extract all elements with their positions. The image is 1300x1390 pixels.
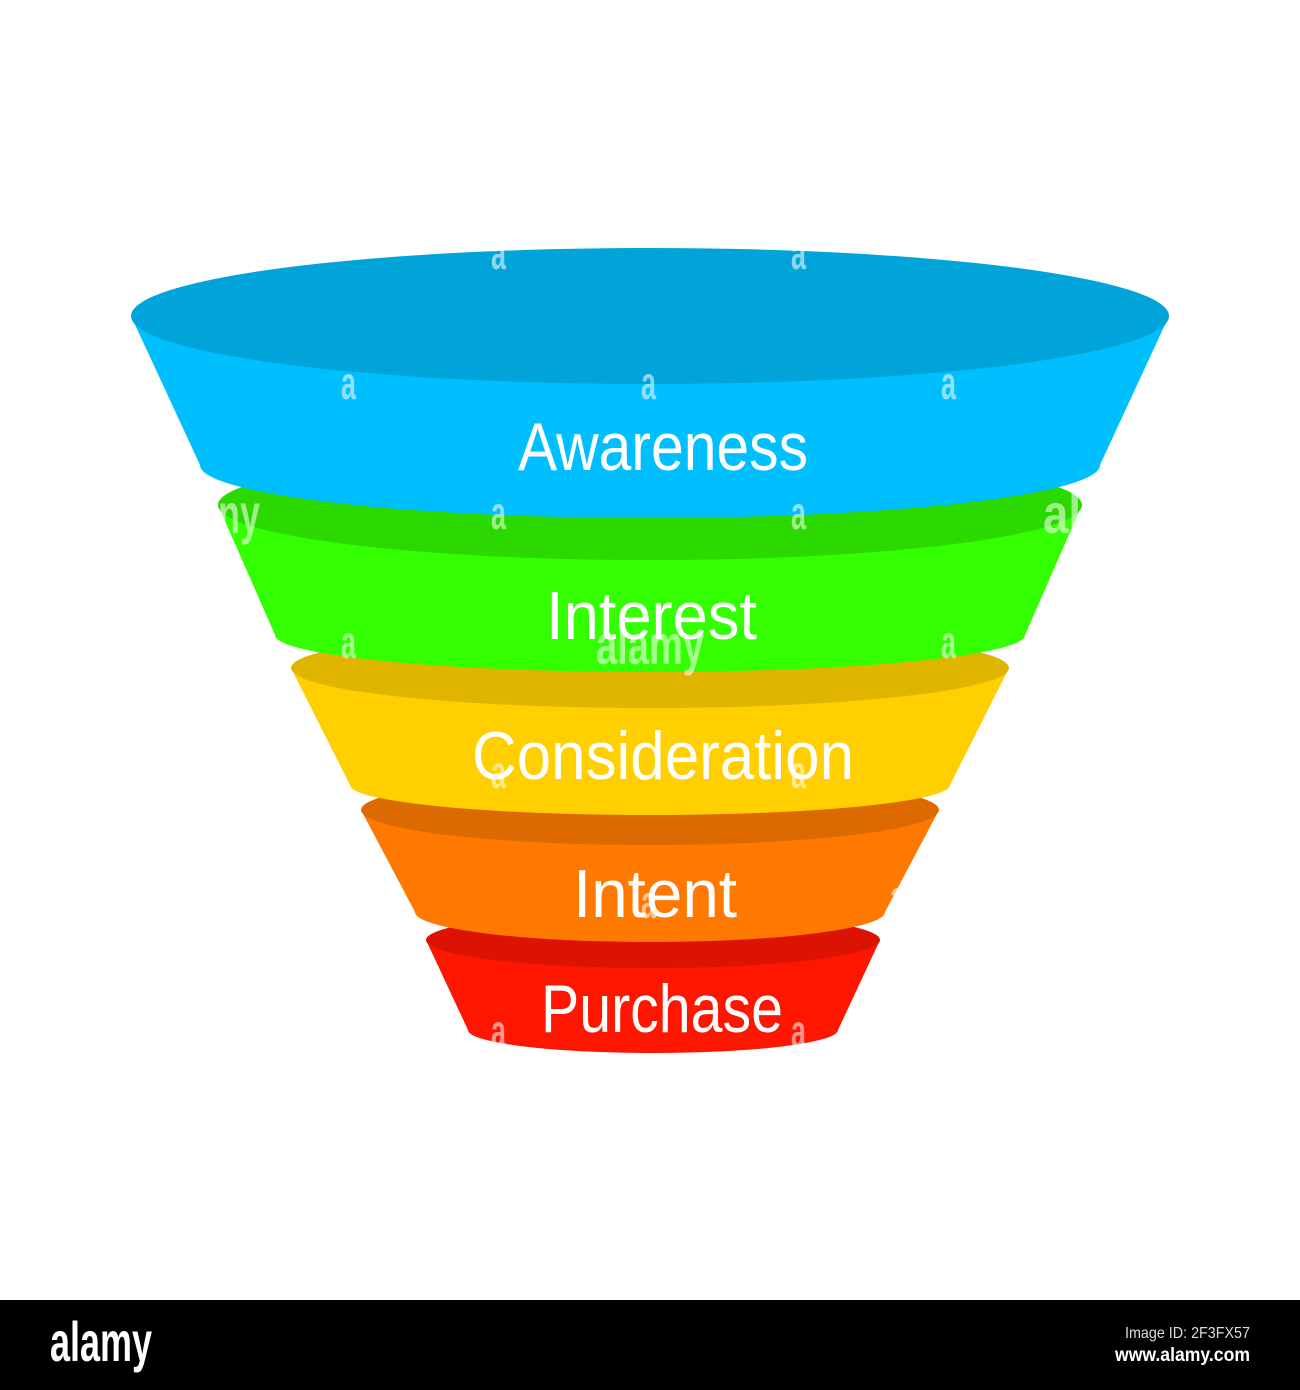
watermarks: a bbox=[791, 1005, 806, 1057]
watermarks: a bbox=[341, 616, 356, 668]
watermarks: a bbox=[941, 616, 956, 668]
watermarks: a bbox=[491, 746, 506, 798]
watermarks: a bbox=[941, 357, 956, 409]
watermarks: ny bbox=[218, 482, 260, 545]
watermarks: a bbox=[491, 227, 506, 279]
footer bar bbox=[0, 1300, 1300, 1390]
watermarks: a bbox=[641, 357, 656, 409]
stage 1: awareness bbox=[131, 248, 1169, 518]
watermarks: a bbox=[491, 1005, 506, 1057]
footer logo: alamy bbox=[50, 1310, 152, 1373]
watermarks: al bbox=[1043, 482, 1081, 545]
image id: Image ID: 2F3FX57 bbox=[1125, 1325, 1250, 1342]
watermarks: a bbox=[791, 487, 806, 539]
watermarks: a bbox=[791, 227, 806, 279]
stage 1: awareness: Awareness bbox=[518, 409, 808, 485]
website: www.alamy.com bbox=[1114, 1345, 1250, 1366]
stage 5: purchase bbox=[426, 912, 880, 1053]
stage 3: consideration bbox=[291, 628, 1009, 815]
watermarks: alamy bbox=[596, 613, 704, 676]
stage 4: intent bbox=[361, 775, 939, 942]
watermarks: a bbox=[641, 876, 656, 928]
stage 4: intent: Intent bbox=[573, 856, 737, 932]
stage 2: interest bbox=[218, 450, 1082, 672]
watermarks: a bbox=[341, 357, 356, 409]
stage 2: interest: Interest bbox=[546, 578, 757, 654]
stage 5: purchase: Purchase bbox=[541, 971, 783, 1047]
watermarks bbox=[218, 227, 1081, 1057]
watermarks: a bbox=[491, 487, 506, 539]
watermarks: a bbox=[791, 746, 806, 798]
watermarks: a bbox=[890, 871, 905, 923]
stage 3: consideration: Consideration bbox=[472, 718, 854, 794]
